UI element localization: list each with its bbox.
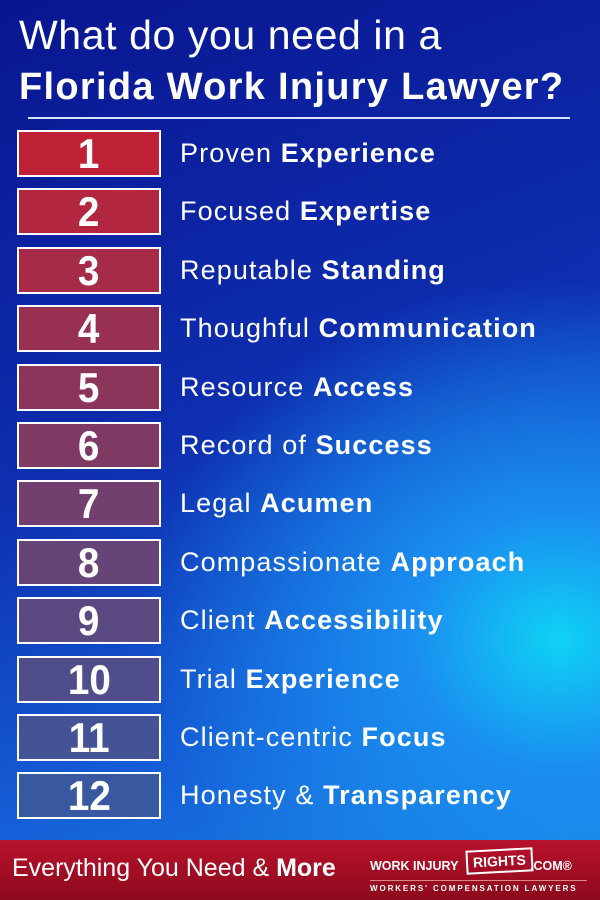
list item 6 <box>17 422 433 469</box>
list item 1: Proven Experience <box>180 138 436 168</box>
footer tagline: Everything You Need & More <box>12 854 336 882</box>
list item 7: Legal Acumen <box>180 488 373 518</box>
logo: RIGHTS <box>473 852 526 870</box>
list item 6: 6 <box>78 422 100 469</box>
list item 11: 11 <box>69 714 109 761</box>
logo: .COM® <box>530 859 572 873</box>
list item 5 <box>17 364 414 411</box>
list item 5: Resource Access <box>180 372 414 402</box>
list item 8: 8 <box>78 539 100 586</box>
list item 3: Reputable Standing <box>180 255 446 285</box>
list item 9: Client Accessibility <box>180 605 444 635</box>
list item 1: 1 <box>78 130 100 177</box>
list item 2: 2 <box>78 188 100 235</box>
list item 12: 12 <box>68 772 110 819</box>
list item 12 <box>17 772 512 819</box>
list item 6: Record of Success <box>180 430 433 460</box>
title: What do you need in a <box>19 12 442 58</box>
list item 1 <box>17 130 436 177</box>
list item 11 <box>17 714 447 761</box>
subtitle: Florida Work Injury Lawyer? <box>19 66 564 108</box>
list item 7: 7 <box>78 480 100 527</box>
logo <box>370 847 587 893</box>
list item 9 <box>17 597 444 644</box>
list item 8 <box>17 539 525 586</box>
list item 3: 3 <box>78 247 100 294</box>
logo: WORKERS' COMPENSATION LAWYERS <box>370 884 578 893</box>
logo: WORK INJURY <box>370 859 458 873</box>
list item 7 <box>17 480 373 527</box>
list item 10: Trial Experience <box>180 664 401 694</box>
list item 11: Client-centric Focus <box>180 722 447 752</box>
list item 10 <box>17 656 401 703</box>
list item 4: Thoughful Communication <box>180 313 537 343</box>
list item 9: 9 <box>78 597 100 644</box>
list item 12: Honesty & Transparency <box>180 780 512 810</box>
list item 2: Focused Expertise <box>180 196 431 226</box>
list item 5: 5 <box>78 364 100 411</box>
list item 4: 4 <box>78 305 100 352</box>
list item 2 <box>17 188 431 235</box>
footer <box>0 840 600 900</box>
list item 10: 10 <box>68 656 110 703</box>
list item 3 <box>17 247 446 294</box>
list item 8: Compassionate Approach <box>180 547 525 577</box>
list item 4 <box>17 305 537 352</box>
